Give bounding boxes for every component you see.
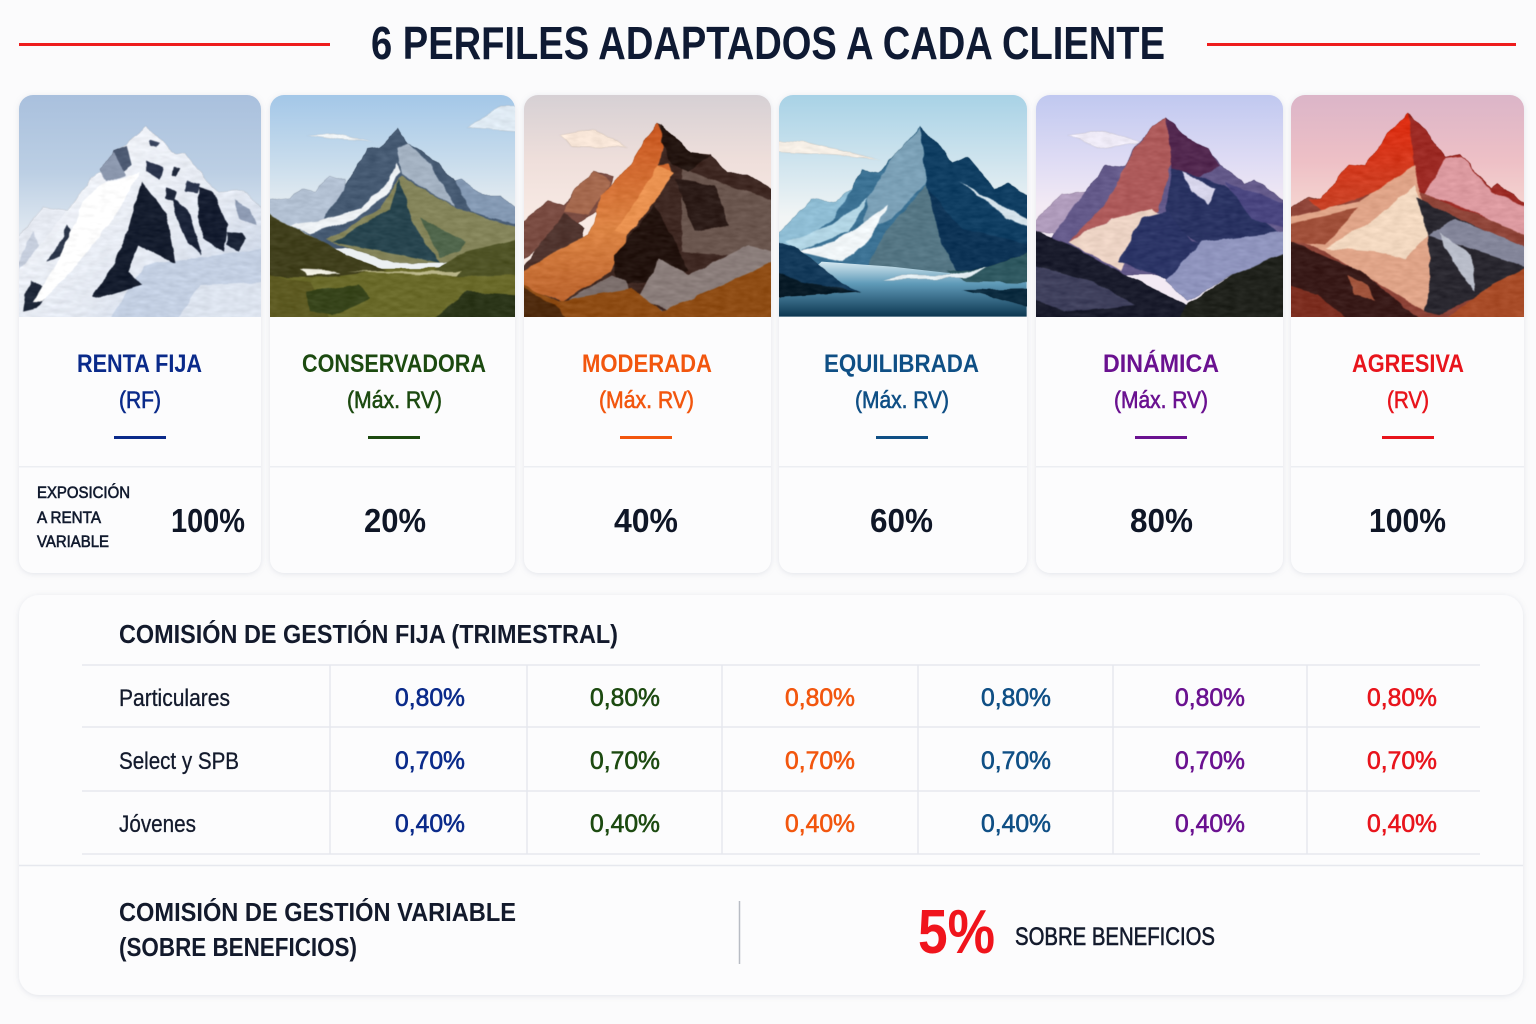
row: Select y SPB: 0,70% (981, 747, 1051, 775)
exposure label: VARIABLE (37, 533, 109, 551)
row: Jóvenes: 0,40% (1175, 810, 1245, 838)
image: snowy mountain (10, 95, 267, 325)
image: green valley mountain (263, 95, 520, 325)
row: Select y SPB (119, 747, 1437, 775)
name: Conservadora: CONSERVADORA (302, 350, 486, 378)
panel: profile card Renta Fija (10, 95, 267, 573)
heading: fixed management fee: COMISIÓN DE GESTIÓN FIJA (TRIMESTRAL) (119, 619, 618, 649)
value: 80% (1130, 502, 1193, 539)
panel: profile card Agresiva (1285, 95, 1530, 573)
sub-label: (Máx. RV) (347, 387, 442, 414)
row: Particulares: 0,80% (395, 684, 465, 712)
heading: variable management fee: COMISIÓN DE GESTIÓN VARIABLE (119, 897, 516, 927)
image: red mountain (1285, 95, 1530, 325)
sub-label: (Máx. RV) (599, 387, 694, 414)
title with side rules: 6 PERFILES ADAPTADOS A CADA CLIENTE (371, 17, 1165, 69)
sub-label: (RV) (1387, 387, 1429, 414)
row: Jóvenes: 0,40% (590, 810, 660, 838)
row: Particulares: Particulares (119, 685, 230, 712)
row: Particulares: 0,80% (1175, 684, 1245, 712)
exposure label (37, 483, 130, 551)
name: Equilibrada: EQUILIBRADA (824, 350, 979, 378)
row: Select y SPB: 0,70% (785, 747, 855, 775)
row: Particulares: 0,80% (1367, 684, 1437, 712)
row: Particulares: 0,80% (590, 684, 660, 712)
panel: profile card Conservadora (263, 95, 520, 573)
fee table (82, 665, 1480, 854)
sub-label: (RF) (119, 387, 161, 414)
heading: variable management fee: (SOBRE BENEFICIOS) (119, 932, 357, 962)
row: Particulares: 0,80% (785, 684, 855, 712)
value: 60% (870, 502, 933, 539)
panel: profile card Moderada (518, 95, 777, 573)
row: Jóvenes (119, 810, 1437, 838)
value: 40% (614, 502, 678, 539)
name: Dinámica: DINÁMICA (1103, 349, 1219, 378)
image: blue mountain and lake (773, 95, 1033, 317)
row: Particulares: 0,80% (981, 684, 1051, 712)
row: Particulares (119, 684, 1437, 712)
row: Select y SPB: 0,70% (590, 747, 660, 775)
row: Jóvenes: 0,40% (1367, 810, 1437, 838)
image: purple mountain (1030, 95, 1288, 325)
exposure label: A RENTA (37, 509, 101, 527)
row: Jóvenes: 0,40% (785, 810, 855, 838)
name: Agresiva: AGRESIVA (1352, 350, 1464, 378)
panel: commissions (19, 595, 1523, 995)
exposure label: EXPOSICIÓN (37, 483, 130, 502)
name: Renta Fija: RENTA FIJA (77, 350, 202, 378)
callout: 5% on profits (918, 898, 1215, 967)
row: Jóvenes: Jóvenes (119, 811, 196, 838)
row: Select y SPB: Select y SPB (119, 748, 239, 775)
callout: 5% on profits: SOBRE BENEFICIOS (1015, 923, 1215, 951)
row: Jóvenes: 0,40% (395, 810, 465, 838)
sub-label: (Máx. RV) (855, 387, 949, 414)
row: Select y SPB: 0,70% (1175, 747, 1245, 775)
title with side rules (19, 17, 1516, 69)
row: Jóvenes: 0,40% (981, 810, 1051, 838)
sub-label: (Máx. RV) (1114, 387, 1208, 414)
value: 100% (1369, 502, 1446, 539)
heading: variable management fee (119, 897, 516, 962)
panel: profile card Equilibrada (773, 95, 1033, 573)
image: orange mountain (518, 95, 777, 325)
value: 20% (364, 502, 426, 539)
row: Select y SPB: 0,70% (1367, 747, 1437, 775)
callout: 5% on profits: 5% (918, 898, 995, 967)
panel: profile card Dinámica (1030, 95, 1288, 573)
row: Select y SPB: 0,70% (395, 747, 465, 775)
value: 100% (171, 502, 245, 539)
name: Moderada: MODERADA (582, 350, 712, 378)
